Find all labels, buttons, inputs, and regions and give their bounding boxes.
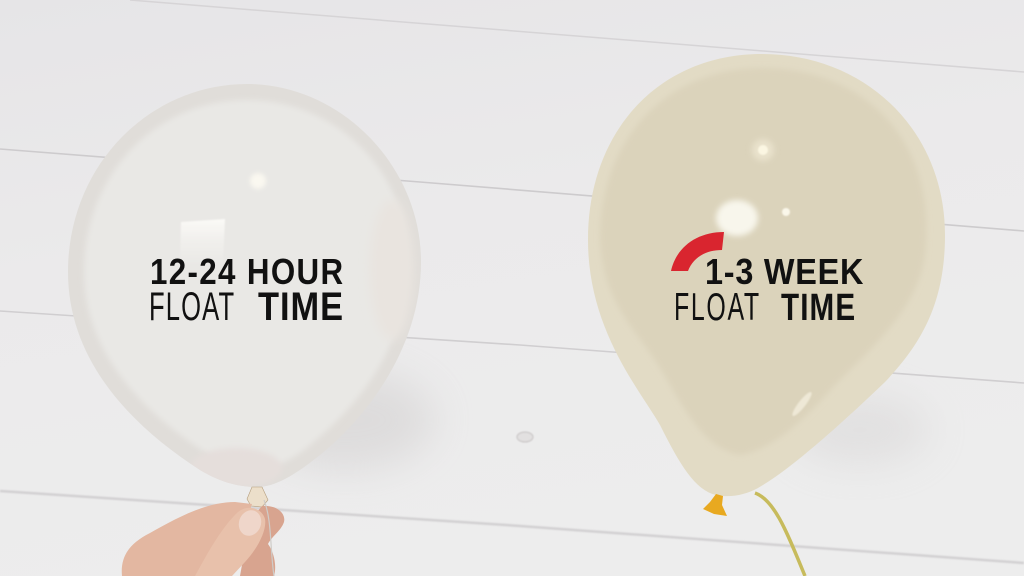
highlight: lower reflection	[790, 390, 814, 418]
balloon shadows	[255, 370, 930, 470]
wood knot	[517, 432, 533, 442]
label: 1-3 week float time	[674, 252, 864, 329]
label: 12-24 hour float time	[149, 252, 343, 330]
label: 1-3 week float time: TIME	[781, 287, 855, 329]
warm tint on right side	[370, 200, 414, 340]
balloon: cream, 1-3 week	[588, 54, 945, 576]
balloon: white, 12-24 hour	[68, 84, 421, 507]
balloon knot	[247, 487, 268, 507]
fingers behind	[240, 506, 284, 576]
thumb	[195, 508, 265, 576]
highlight: side glint	[782, 208, 790, 216]
label: 12-24 hour float time: TIME	[258, 284, 343, 329]
highlight: small glint	[758, 145, 768, 155]
highlight: window reflection	[716, 200, 758, 236]
highlight: small glint	[250, 173, 266, 189]
label: 12-24 hour float time: FLOAT	[149, 285, 234, 330]
pink reflection at base	[215, 450, 275, 467]
ribbon: gold	[755, 493, 805, 576]
label: 12-24 hour float time: 12-24 HOUR	[150, 252, 343, 293]
thumbnail	[235, 507, 265, 539]
balloon knot: yellow	[703, 494, 727, 516]
icon: red arc	[671, 232, 724, 271]
label: 1-3 week float time: FLOAT	[674, 284, 759, 328]
hand holding white balloon	[122, 500, 284, 576]
label: 1-3 week float time: 1-3 WEEK	[705, 252, 864, 292]
highlight: small glint halo	[752, 139, 774, 161]
highlight: window reflection	[180, 219, 225, 263]
palm	[122, 502, 252, 576]
string	[264, 500, 274, 576]
